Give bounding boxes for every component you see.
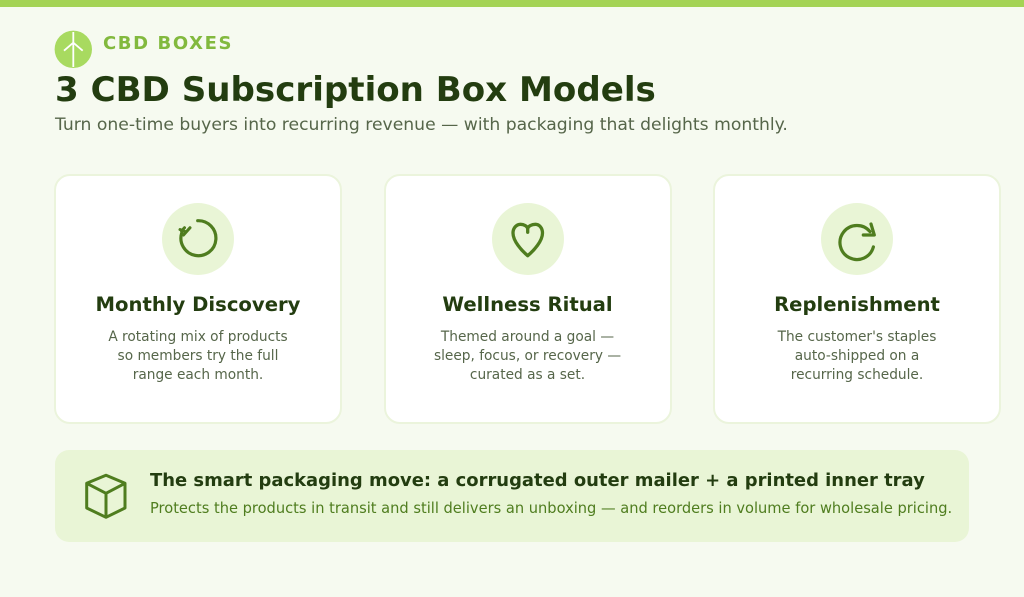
description: curated as a set.	[470, 367, 585, 383]
heading: Monthly Discovery	[96, 292, 300, 316]
brand label: CBD BOXES	[103, 33, 233, 54]
description	[108, 329, 288, 383]
description	[778, 329, 936, 383]
heading: Wellness Ritual	[442, 292, 613, 316]
panel: replenishment	[713, 174, 1001, 424]
icon: discovery cycle	[162, 203, 234, 275]
icon: refresh arrow	[821, 203, 893, 275]
callout text: Protects the products in transit and still delivers an unboxing — and reorders in volume for wholesale pricing.	[150, 500, 952, 517]
panel: monthly discovery	[54, 174, 342, 424]
description: Themed around a goal —	[441, 329, 614, 345]
description	[434, 329, 621, 383]
description: recurring schedule.	[791, 367, 923, 383]
title: 3 CBD Subscription Box Models	[55, 70, 656, 110]
subtitle: Turn one-time buyers into recurring revenue — with packaging that delights monthly.	[55, 114, 788, 134]
callout: packaging	[55, 450, 969, 542]
callout heading: The smart packaging move: a corrugated outer mailer + a printed inner tray	[150, 470, 925, 491]
icon: box	[85, 474, 126, 519]
description: A rotating mix of products	[108, 329, 288, 345]
description: sleep, focus, or recovery —	[434, 348, 621, 364]
panel: wellness ritual	[384, 174, 672, 424]
icon: heart	[492, 203, 564, 275]
description: The customer's staples	[778, 329, 936, 345]
description: auto-shipped on a	[795, 348, 919, 364]
top accent bar	[0, 0, 1024, 7]
description: range each month.	[133, 367, 263, 383]
logo icon	[54, 30, 92, 68]
heading: Replenishment	[774, 292, 940, 316]
description: so members try the full	[118, 348, 278, 364]
